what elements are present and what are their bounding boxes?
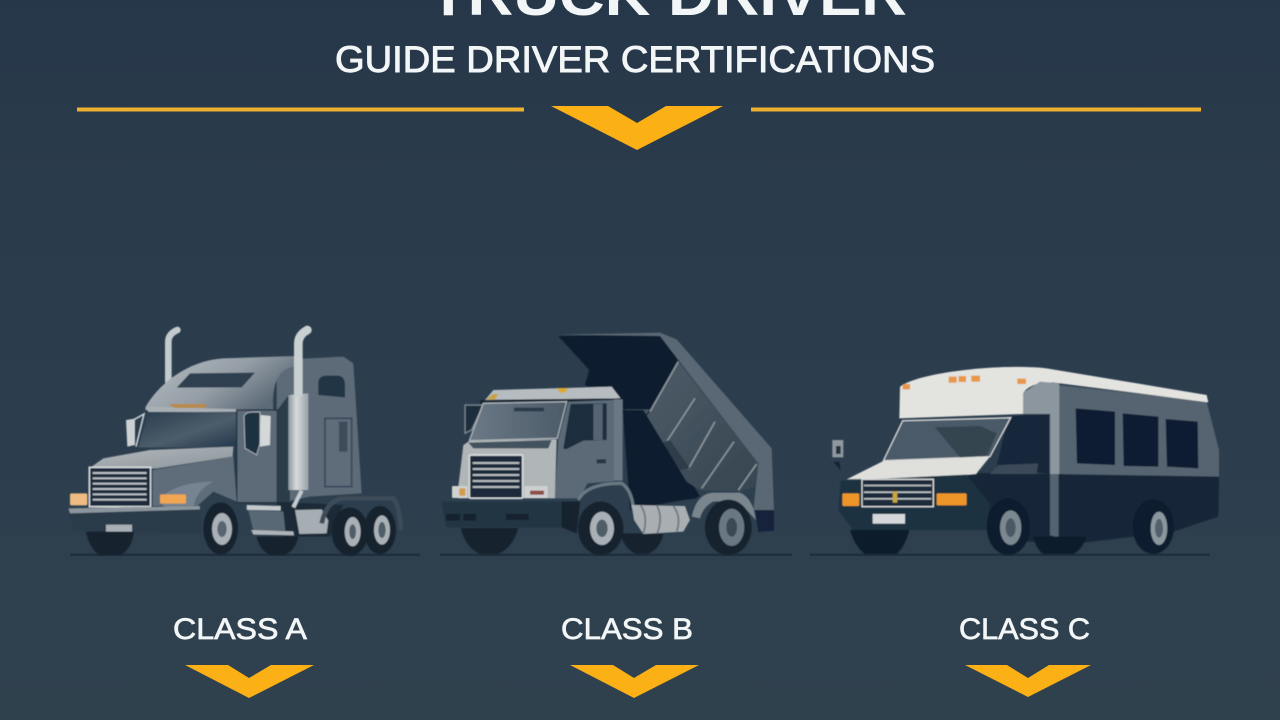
ground lines (70, 554, 1210, 556)
wheels (987, 498, 1174, 555)
roof marker lights (903, 376, 1026, 389)
icon: chevron class C (965, 665, 1091, 697)
headlights (452, 486, 548, 498)
label: class C: CLASS C (959, 613, 1090, 646)
icon: header chevron (551, 106, 723, 150)
mirror (126, 414, 144, 447)
label: class C (959, 613, 1091, 697)
wheels (578, 500, 752, 555)
header divider with chevron (77, 106, 1201, 150)
truck: class B dump truck (442, 333, 774, 555)
headlights (70, 493, 186, 505)
label: class A: CLASS A (173, 613, 307, 646)
truck: class A semi tractor (68, 330, 401, 556)
wheels (203, 502, 396, 556)
truck: class C shuttle bus (832, 367, 1219, 555)
label: class A (173, 613, 314, 698)
subtitle: GUIDE DRIVER CERTIFICATIONS (335, 39, 935, 80)
label: class B (561, 613, 699, 698)
headlights (842, 493, 967, 506)
licence plate (873, 514, 905, 524)
grille (89, 467, 151, 507)
grille (862, 479, 933, 507)
mirror (832, 440, 843, 471)
icon: chevron class B (570, 665, 699, 698)
label: class B: CLASS B (561, 613, 693, 646)
icon: chevron class A (185, 665, 314, 698)
grille (469, 455, 523, 498)
windows (1076, 408, 1198, 468)
fuel tank (632, 505, 690, 534)
bed ribs (650, 362, 757, 490)
